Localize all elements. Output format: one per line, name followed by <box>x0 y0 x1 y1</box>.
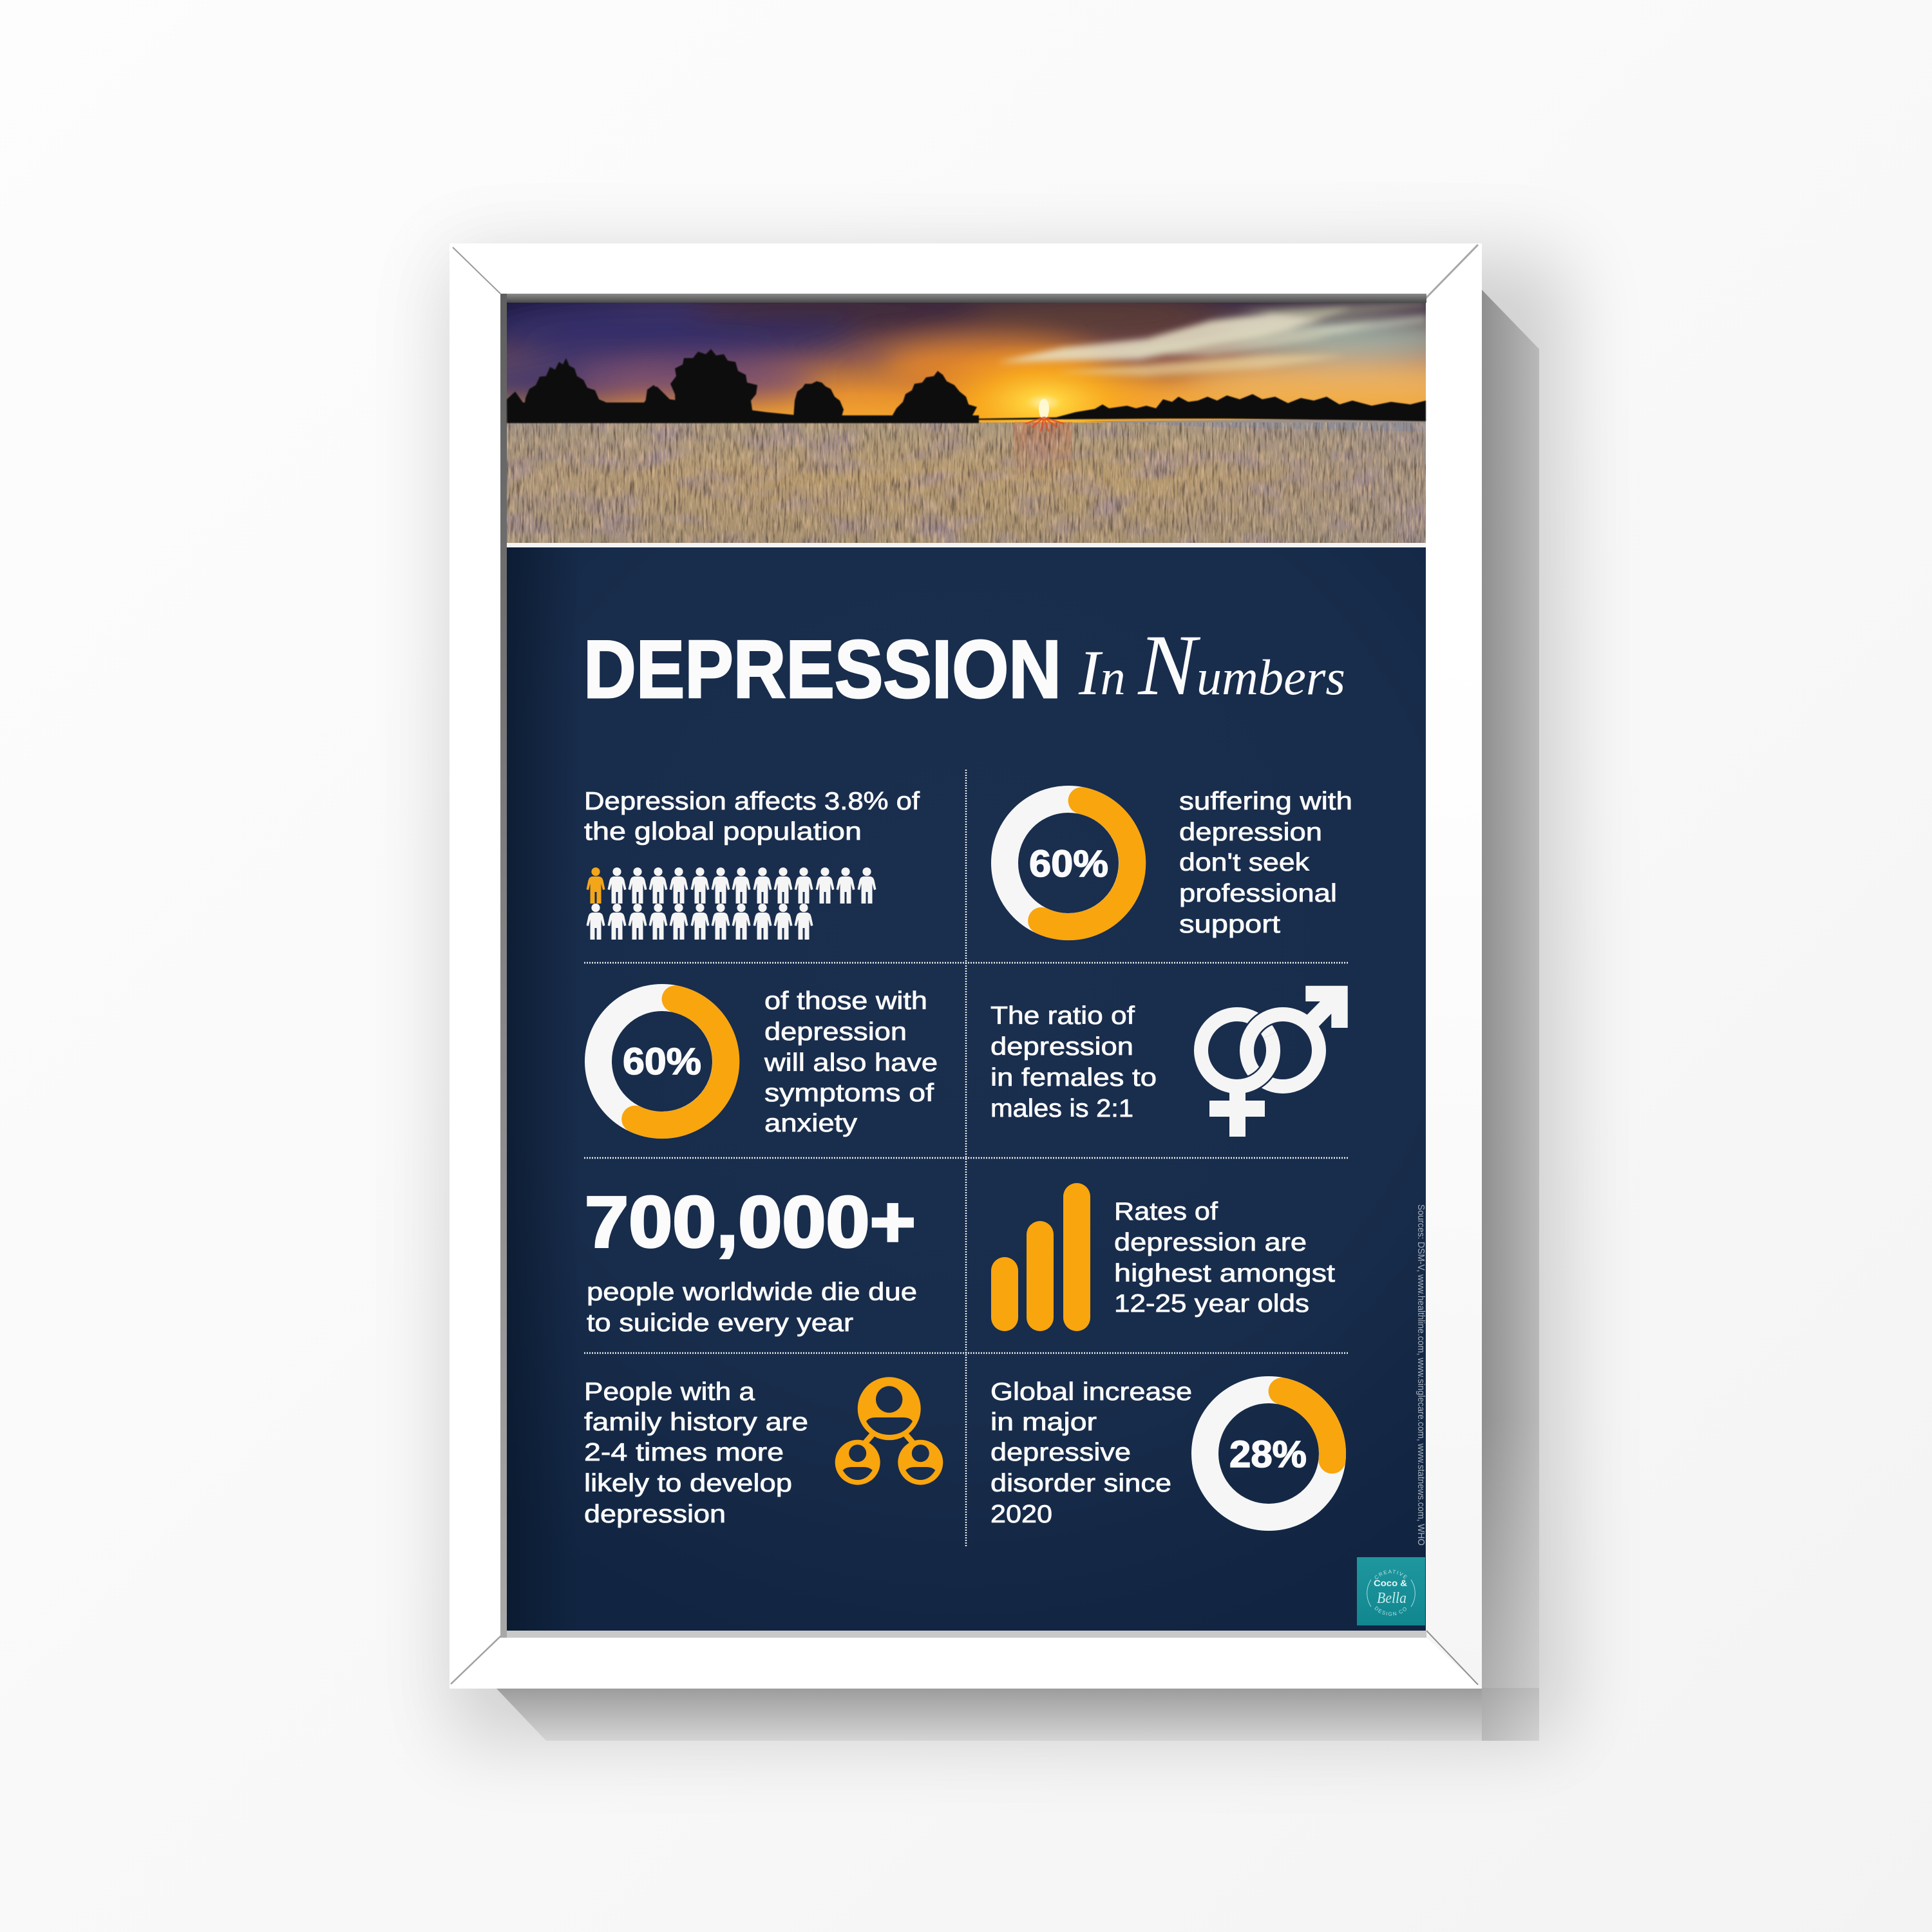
text: support <box>1179 788 1352 938</box>
text: increase: disorder since <box>990 1470 1171 1497</box>
sky <box>507 303 1426 422</box>
text: age: depression are <box>1114 1229 1307 1256</box>
icon: family tree of people <box>835 1377 943 1485</box>
logo: Coco and Bella: CREATIVE <box>1374 1570 1408 1579</box>
text: ratio <box>990 1002 1157 1122</box>
cast shadow of frame <box>496 290 1539 1741</box>
text: family: 2-4 times more <box>584 1439 784 1466</box>
donut chart 60%: 60% <box>1029 843 1108 885</box>
text: support: suffering with <box>1179 788 1352 815</box>
stat: gender ratio <box>990 986 1348 1137</box>
text: support: depression <box>1179 819 1322 846</box>
tree silhouettes <box>507 349 1426 423</box>
text: anxiety: will also have <box>764 1049 938 1077</box>
donut chart 60% anxiety: 60% <box>623 1041 701 1083</box>
text: ratio: depression <box>990 1033 1133 1061</box>
icon: people pictogram <box>586 867 876 940</box>
stat: global population <box>584 788 920 940</box>
text: family: family history are <box>584 1408 808 1436</box>
text: increase: 2020 <box>990 1501 1052 1528</box>
strip between photo and navy panel <box>507 543 1426 547</box>
sources note: Sources: DSM-V, www.healthline.com, www.singlecare.com, www.statnews.com, WHO <box>1416 1204 1426 1546</box>
logo: Coco and Bella: DESIGN CO <box>1374 1606 1406 1616</box>
logo: Coco and Bella: Bella <box>1377 1590 1406 1607</box>
text: ratio: The ratio of <box>990 1002 1135 1030</box>
text: increase <box>990 1378 1192 1528</box>
text: support: don't seek <box>1179 849 1310 876</box>
stat: age rates <box>991 1183 1335 1331</box>
text: suicide: to suicide every year <box>587 1309 853 1337</box>
text: support: professional <box>1179 880 1337 907</box>
stat: 60% don't seek support <box>1005 788 1352 938</box>
sun <box>1025 399 1064 431</box>
text: anxiety: anxiety <box>764 1110 858 1137</box>
poster photo: sunset over wheat field <box>506 303 1427 543</box>
icon: gender symbols <box>1201 986 1348 1137</box>
logo: Coco and Bella: Coco & <box>1374 1578 1407 1588</box>
title script part: In Numbers <box>1078 618 1345 714</box>
stat: global increase 28% <box>990 1378 1332 1528</box>
text: ratio: in females to <box>990 1064 1157 1092</box>
text: family: likely to develop <box>584 1470 792 1497</box>
white picture frame <box>450 243 1482 1689</box>
donut chart 28% <box>1205 1390 1332 1517</box>
text: age <box>1114 1198 1335 1318</box>
text: anxiety: depression <box>764 1018 907 1046</box>
text: ratio: males is 2:1 <box>990 1095 1133 1122</box>
text: anxiety: symptoms of <box>764 1079 934 1107</box>
grid dividers <box>584 770 1348 1546</box>
title: DEPRESSION <box>583 623 1061 715</box>
logo: Coco and Bella <box>1357 1557 1425 1625</box>
stat: family history <box>584 1377 943 1528</box>
text: suicide: people worldwide die due <box>587 1278 917 1306</box>
navy poster panel <box>507 547 1426 1631</box>
donut chart 60% <box>1005 799 1132 927</box>
text: age: Rates of <box>1114 1198 1218 1226</box>
stat: 60% anxiety <box>598 987 938 1137</box>
big number: 700,000+ <box>585 1182 916 1262</box>
title <box>583 618 1345 715</box>
text: anxiety: of those with <box>764 987 927 1015</box>
text: family: People with a <box>584 1378 755 1406</box>
text: population: Depression affects 3.8% of <box>584 788 920 815</box>
text: increase: Global increase <box>990 1378 1192 1406</box>
text: anxiety <box>764 987 938 1137</box>
text: age: 12-25 year olds <box>1114 1290 1309 1318</box>
text: suicide <box>587 1278 917 1337</box>
text: support: support <box>1179 911 1280 938</box>
donut chart 28%: 28% <box>1229 1434 1307 1475</box>
text: increase: depressive <box>990 1439 1131 1466</box>
text: family: depression <box>584 1501 726 1528</box>
text: population: the global population <box>584 818 862 846</box>
bar chart <box>991 1183 1090 1331</box>
text: age: highest amongst <box>1114 1260 1335 1287</box>
text: family <box>584 1378 808 1528</box>
soft wall shadow around frame <box>451 258 1565 1739</box>
donut chart 60% anxiety <box>598 998 726 1125</box>
wheat field <box>507 422 1426 543</box>
stat: 700,000+ <box>585 1182 917 1337</box>
text: increase: in major <box>990 1408 1097 1436</box>
text: population <box>584 788 920 846</box>
